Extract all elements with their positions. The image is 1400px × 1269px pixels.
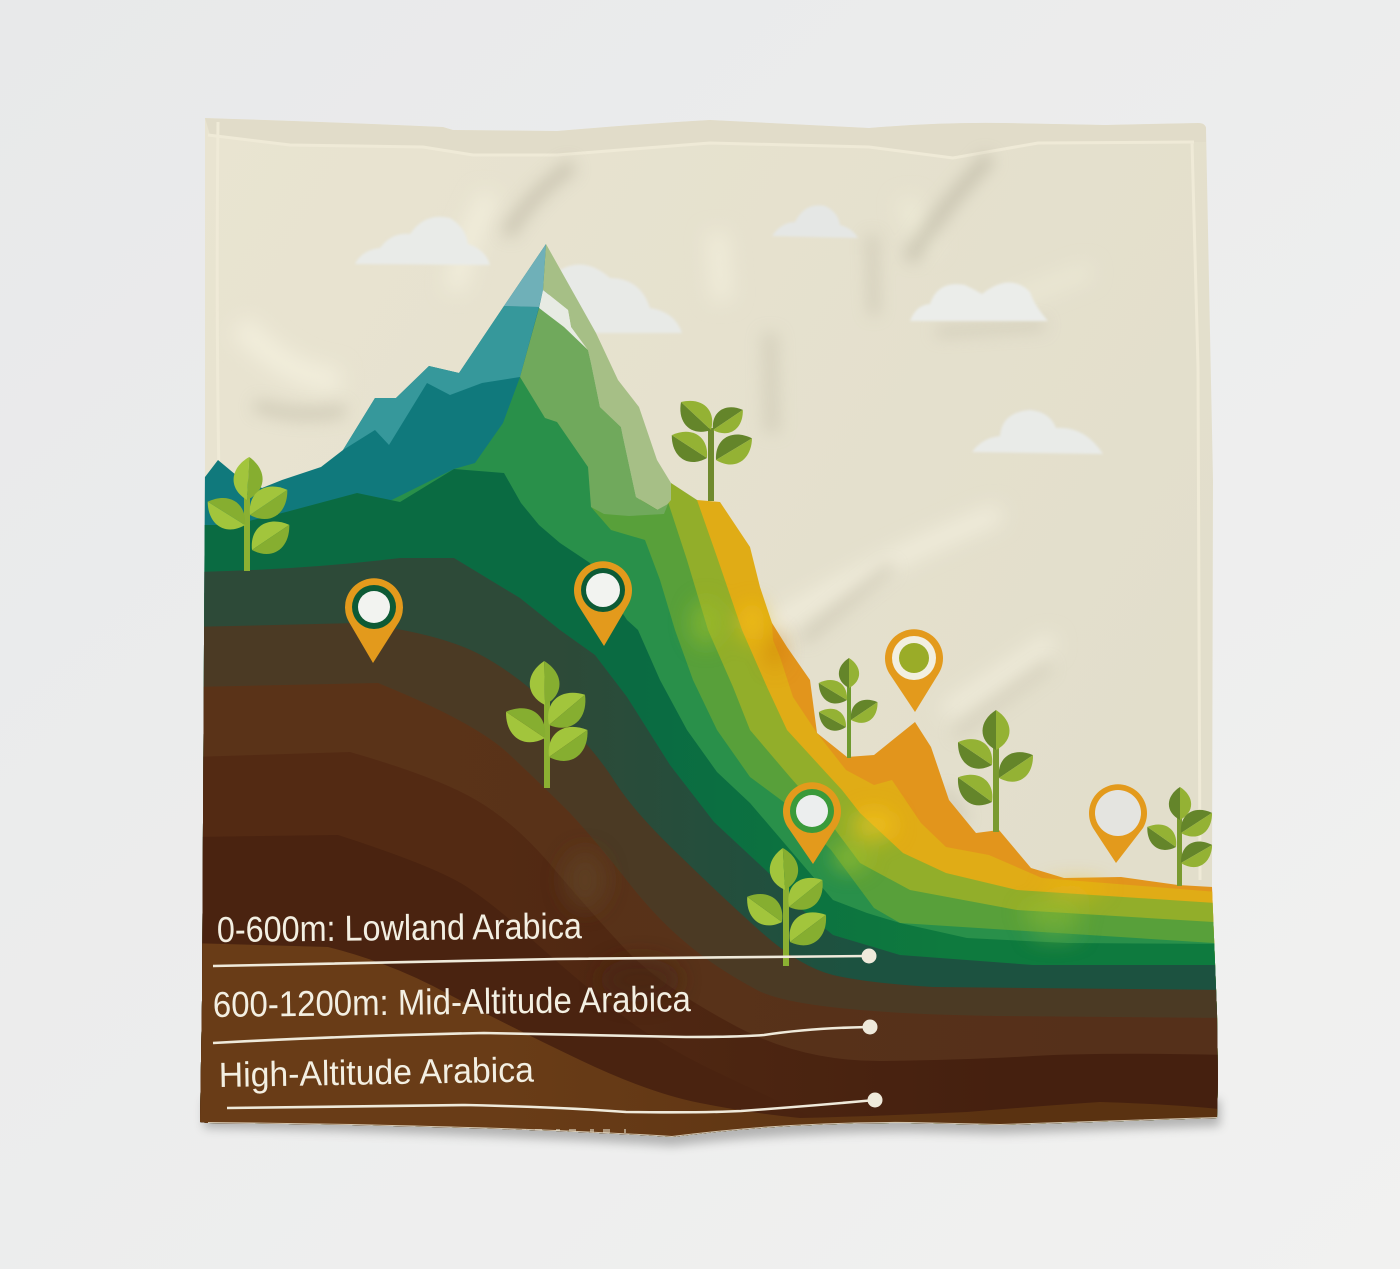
mid green layer: [200, 377, 1218, 1128]
soft light folds: [247, 332, 1042, 705]
dark brown layer: [200, 752, 1218, 1136]
label 3: [218, 1050, 882, 1112]
pale blue summit: [504, 244, 546, 307]
leader dot 1: [862, 948, 876, 964]
bottom edge rim: [208, 1118, 1217, 1137]
plant: far left: [208, 457, 290, 571]
yellow layer: [697, 500, 1218, 1098]
dark green layer: [200, 469, 1218, 1130]
light green layer: [591, 502, 1218, 1053]
soft dark folds: [255, 157, 1050, 820]
label text 2: 600-1200m: Mid-Altitude Arabica: [213, 978, 692, 1025]
hem stitching: [208, 122, 1200, 880]
bottom light brown layer: [200, 944, 1218, 1136]
leader line 1: [213, 956, 869, 966]
pale green ridge: [543, 244, 671, 512]
light teal ridge: [343, 306, 539, 450]
label text 1: 0-600m: Lowland Arabica: [217, 905, 583, 950]
leader line 3: [227, 1100, 875, 1112]
leader dot 2: [862, 1020, 878, 1034]
olive layer: [640, 483, 1218, 1052]
bottom cut-off text fragments: [504, 1129, 626, 1133]
blanket artwork: [190, 110, 1230, 1200]
orange layer: [772, 623, 1218, 1097]
label text 3: High-Altitude Arabica: [218, 1050, 535, 1095]
light green face: [520, 308, 668, 516]
hem band: [206, 118, 1206, 130]
leader line 2: [213, 1027, 869, 1043]
dark teal ridge: [204, 244, 549, 606]
plant: small on the orange ledge: [818, 658, 878, 758]
cream sky: [205, 118, 1213, 887]
plant: right hill: [958, 710, 1033, 832]
plant: centre: [506, 661, 588, 788]
pin 4: [783, 782, 841, 864]
brown layer: [200, 683, 1218, 1132]
grey brown layer: [200, 623, 1218, 1132]
grey green layer: [200, 558, 1218, 1125]
plant: on the ridge: [672, 400, 752, 501]
cloud 1: [355, 217, 490, 265]
snow patch: [539, 290, 586, 348]
label 2: [213, 978, 878, 1043]
blanket shadow: [204, 1100, 1220, 1146]
label 1: [213, 905, 876, 966]
fold highlights over the slope: [563, 599, 1105, 1002]
plant: lower slope: [747, 848, 826, 966]
mountain upper sections: [204, 244, 671, 606]
fabric folds in the sky: [240, 157, 1090, 820]
cloud 2: [560, 265, 682, 333]
pin 1: [345, 578, 403, 663]
pin 5: [1089, 784, 1147, 863]
cloud 4: [910, 282, 1048, 321]
plant: far right: [1141, 787, 1219, 886]
cloud 5: [972, 410, 1103, 454]
cloud 3: [772, 205, 858, 238]
pin 3: [885, 629, 943, 712]
pin 2: [574, 561, 632, 646]
darkest brown layer: [200, 835, 822, 1137]
leader dot 3: [868, 1092, 882, 1108]
